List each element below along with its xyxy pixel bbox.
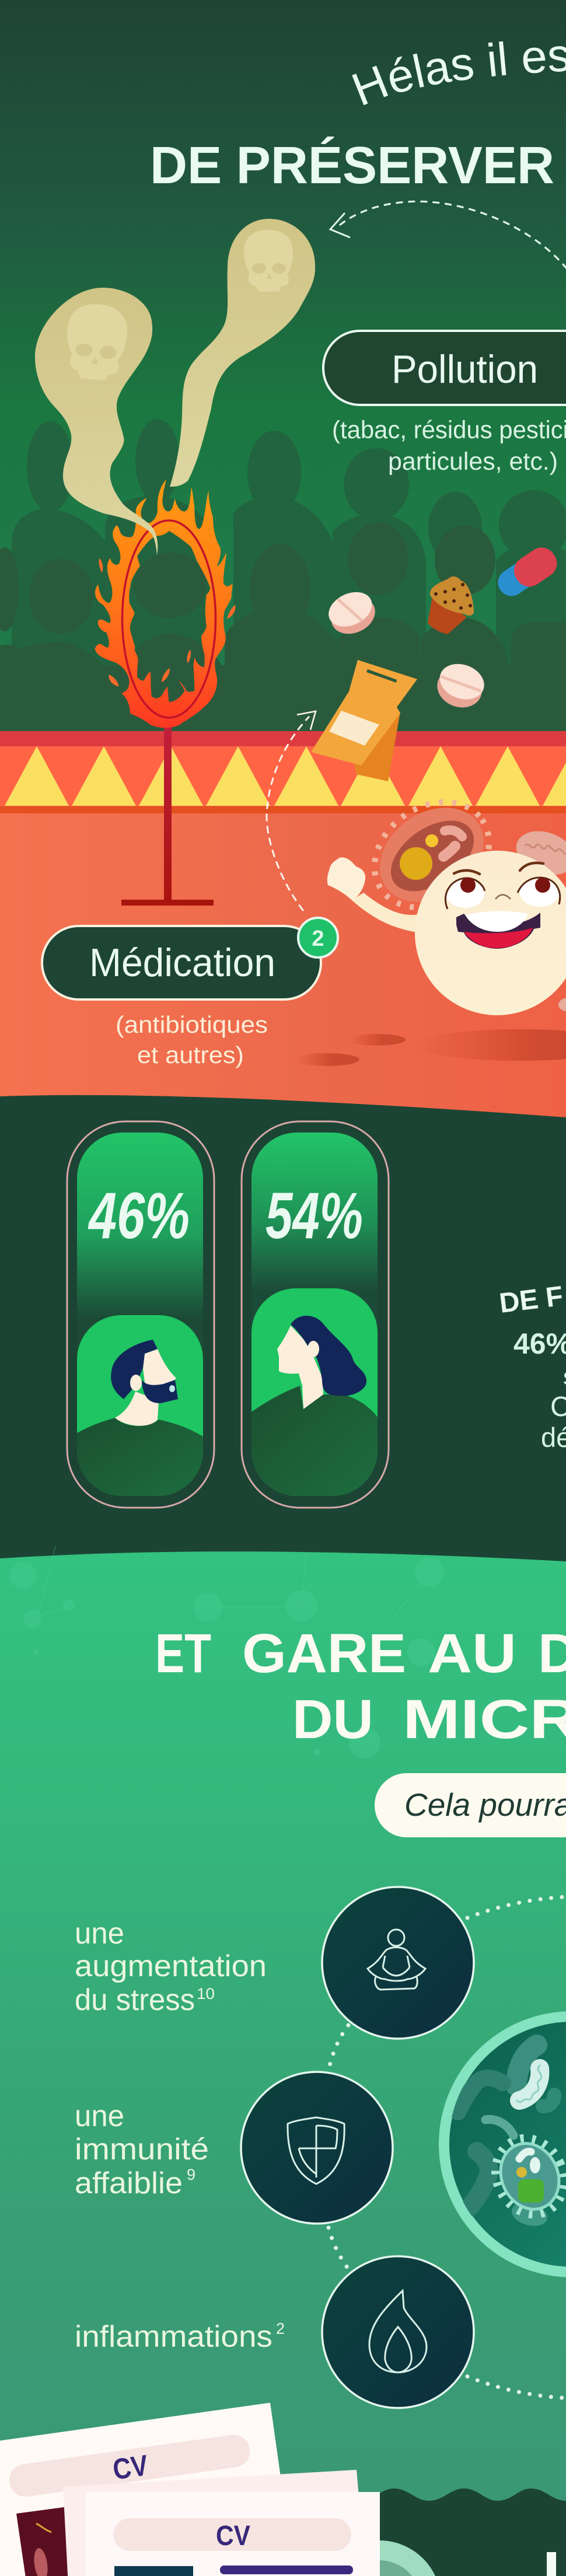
value: 46%: 46% <box>88 1179 190 1252</box>
pill: cela pourrait <box>375 1773 566 1837</box>
man shirt <box>77 1418 203 1500</box>
bacteria blobs <box>458 2045 554 2218</box>
title: gare au déséquilibre: MICR <box>403 1689 566 1750</box>
woman portrait <box>277 1316 366 1409</box>
capsule: men 46% <box>67 1121 214 1514</box>
partial letter <box>547 2552 556 2576</box>
right eye <box>518 863 560 907</box>
title: de préserver: DE PRÉSERVER <box>150 136 554 195</box>
skull: right <box>244 230 293 292</box>
character: arm <box>352 893 418 932</box>
character: cell behind <box>354 781 509 929</box>
icon: shield <box>288 2117 344 2184</box>
text: inflammations: inflammations <box>75 2320 272 2354</box>
arrow: medication to packet <box>267 711 316 911</box>
woman shirt <box>251 1386 378 1500</box>
text: stress <box>75 1917 267 2017</box>
text: immunity <box>75 2099 209 2200</box>
text: stress: une <box>75 1917 124 1951</box>
crowd silhouettes <box>0 419 566 732</box>
pill: pollution <box>323 331 566 405</box>
skull: left <box>62 301 130 383</box>
tablet: right <box>432 658 489 714</box>
text: medication details: (antibiotiques <box>116 1011 268 1038</box>
section: green background <box>0 1551 566 2576</box>
icon: flame <box>369 2291 427 2372</box>
character: hand <box>327 858 365 900</box>
character: body <box>415 851 566 1015</box>
bacterium <box>491 2134 566 2218</box>
title: gare au déséquilibre: DU <box>292 1689 373 1750</box>
label: medication: Médication <box>89 941 275 985</box>
section: bottom dark wave <box>373 2488 566 2576</box>
badge: 2 <box>298 918 338 957</box>
dotted connectors <box>329 1897 566 2398</box>
capsule <box>492 542 562 603</box>
text: stress: 10 <box>197 1985 215 2002</box>
smoke: left plume <box>35 288 158 555</box>
circle: immunity <box>241 2072 393 2224</box>
text: immunity: affaiblie <box>75 2166 183 2200</box>
arrow: pollution to smoke <box>330 201 566 271</box>
hoop ring <box>123 520 216 718</box>
CV: front paper: CV <box>216 2521 250 2551</box>
ball: bottom <box>317 2540 441 2576</box>
text: medication details: et autres) <box>137 1041 244 1068</box>
floor shadows <box>294 1029 566 1066</box>
badge: 2: 2 <box>312 927 324 951</box>
CV: middle paper <box>63 2470 368 2576</box>
CV: back paper <box>0 2403 298 2576</box>
text: immunity: immunité <box>75 2133 209 2166</box>
mouth <box>456 911 540 949</box>
character: lower spikes <box>558 998 566 1012</box>
text: immunity: une <box>75 2099 124 2133</box>
man portrait <box>111 1340 178 1426</box>
text: right statistics <box>498 1281 566 1453</box>
circle: inflammation <box>322 2256 474 2408</box>
hoop pole <box>121 715 214 906</box>
text: pollution details <box>332 416 566 476</box>
molecule decor <box>10 1546 444 1759</box>
text: immunity: 9 <box>187 2166 195 2183</box>
tablet: left <box>323 585 381 641</box>
smoke: right plume <box>170 219 315 487</box>
circus band <box>0 731 566 813</box>
circle: stress <box>322 1887 474 2039</box>
background: circus top <box>0 0 566 735</box>
text: stress: augmentation <box>75 1949 267 1983</box>
label: pollution: Pollution <box>392 347 538 392</box>
text: pollution details: particules, etc.) <box>388 448 558 476</box>
character: mitochondrion behind <box>510 823 566 883</box>
title: gare au déséquilibre: ET <box>155 1623 211 1684</box>
left eye <box>445 871 485 909</box>
title: gare au déséquilibre: AU <box>428 1623 516 1684</box>
section: statistics background <box>0 1095 566 1575</box>
text: medication details <box>116 1011 268 1068</box>
medicine packet <box>311 660 417 781</box>
text: stress: du stress <box>75 1983 195 2017</box>
capsule: women 54% <box>242 1121 389 1516</box>
value: 54%: 54% <box>265 1179 363 1252</box>
mitochondrion <box>517 2065 541 2102</box>
CV: front paper <box>86 2492 380 2576</box>
icon: meditation <box>368 1930 425 1990</box>
title: gare au déséquilibre <box>155 1623 566 1750</box>
text: right statistics: DE F <box>498 1281 565 1319</box>
hoop of fire <box>95 480 236 728</box>
pill: medication <box>42 926 321 999</box>
title: gare au déséquilibre: GARE <box>242 1623 406 1684</box>
floor <box>0 813 566 1128</box>
CV: back paper: CV <box>111 2449 151 2486</box>
microbiome circle <box>444 2016 566 2272</box>
text: inflammations: 2 <box>276 2320 285 2337</box>
photo <box>16 2507 73 2576</box>
nose <box>495 895 511 899</box>
muffin <box>428 576 474 634</box>
heading: Hélas: Hélas il es <box>352 41 566 105</box>
